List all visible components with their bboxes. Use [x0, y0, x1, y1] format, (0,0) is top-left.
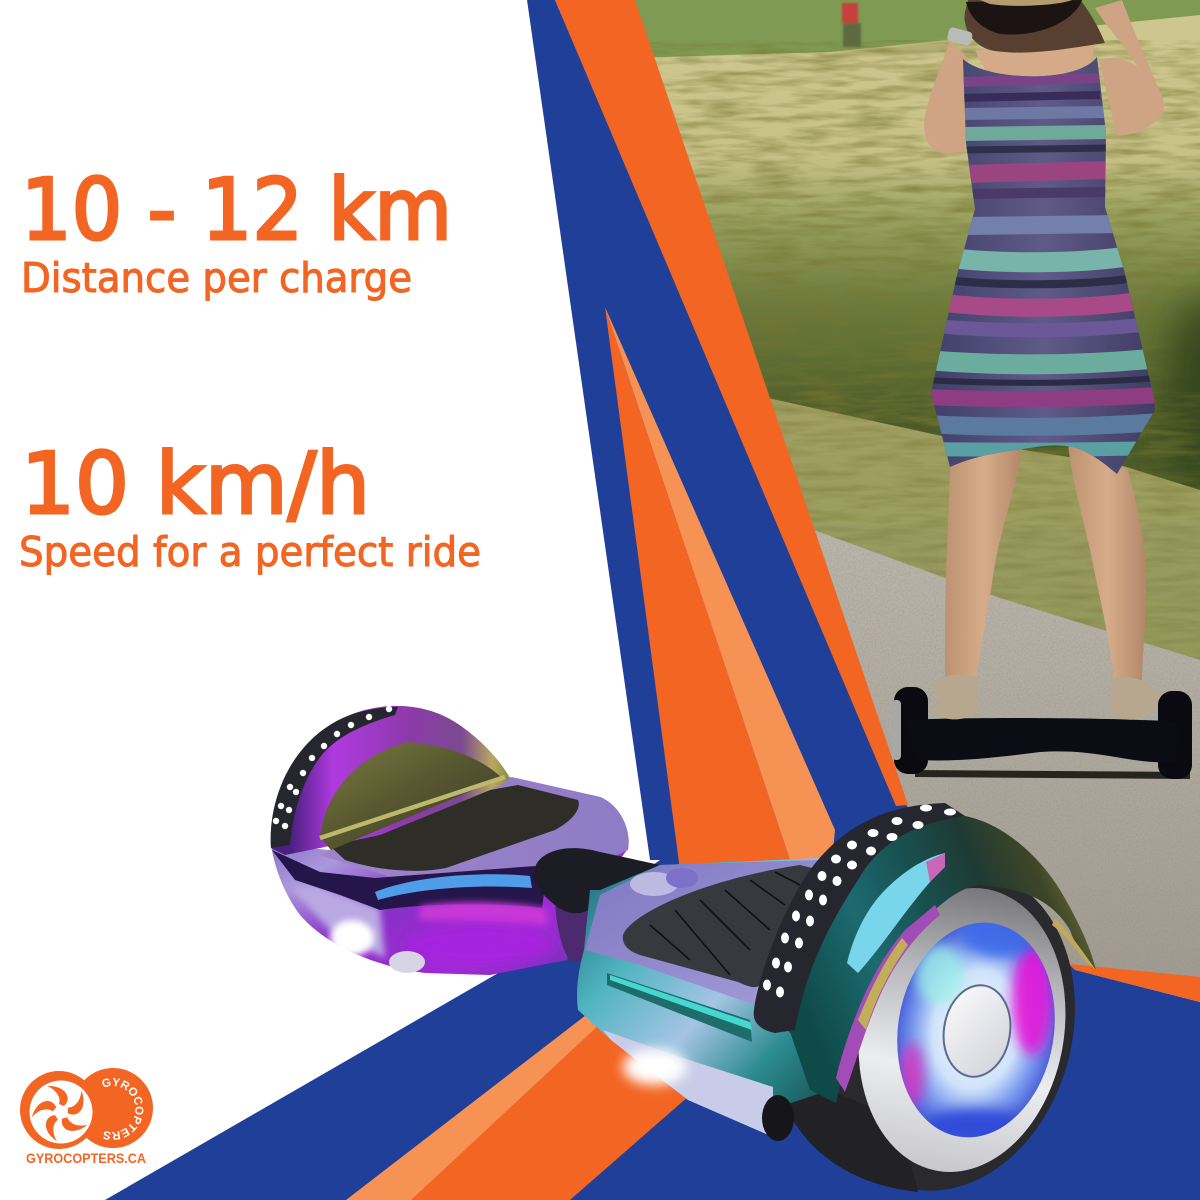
front mat grooves — [650, 872, 800, 975]
left wheel highlight — [892, 700, 901, 760]
lower stripe: light orange — [346, 1012, 602, 1200]
front LED strip — [754, 803, 965, 1033]
inner spike: orange — [605, 307, 790, 870]
gold fender tip edge — [1052, 918, 1096, 970]
rear magenta reflection — [420, 902, 548, 925]
distant figure in red — [842, 3, 861, 47]
hoverboard product — [271, 706, 1110, 1200]
distance value: 10 - 12 km — [21, 161, 452, 260]
hub — [937, 980, 1017, 1082]
rear LED dots — [273, 706, 392, 829]
speed value: 10 km/h — [21, 435, 370, 534]
dark crop on the right — [1165, 295, 1200, 505]
rear LED strip — [271, 707, 398, 848]
magenta glow — [1012, 945, 1052, 1055]
rear purple glow — [405, 925, 555, 965]
front LED dots — [763, 804, 956, 998]
left arm — [924, 40, 968, 153]
grass texture — [772, 394, 1200, 644]
deck logo — [630, 868, 698, 896]
upper back — [975, 45, 1095, 76]
stat: distance per charge — [21, 161, 452, 302]
front body — [577, 858, 840, 1137]
rear axle shadow — [762, 1095, 794, 1141]
front head lamp — [623, 1049, 687, 1085]
front lower pale body — [603, 1030, 773, 1137]
distant path — [815, 40, 950, 58]
right wheel — [1158, 691, 1192, 779]
tread — [785, 1090, 918, 1192]
small hoverboard — [892, 687, 1192, 779]
road texture — [800, 525, 1200, 1005]
hair — [965, 0, 1105, 53]
front fender — [787, 816, 1096, 1103]
twin ring — [73, 1068, 153, 1148]
tire — [786, 840, 1110, 1200]
right leg — [1068, 444, 1146, 685]
path verge grass — [770, 398, 1200, 660]
cyan reflection — [610, 975, 752, 1030]
pink edge of reflection — [926, 853, 945, 882]
front foot mat — [623, 865, 812, 987]
lower left magenta glow — [900, 1043, 924, 1107]
glowing wheel disc — [897, 922, 1055, 1138]
right sandal — [1110, 677, 1161, 720]
dress stripes — [925, 78, 1160, 450]
rear button — [389, 951, 425, 973]
cyan fender reflection — [847, 853, 945, 973]
rear pale lower flank — [290, 884, 385, 958]
left wheel — [894, 687, 928, 774]
right arm — [1095, 0, 1165, 135]
rear body — [271, 777, 628, 975]
neck joint — [534, 848, 660, 913]
dress — [925, 57, 1160, 474]
hat brim — [980, 0, 1072, 6]
rim — [837, 871, 1087, 1189]
field texture — [630, 40, 1200, 460]
purple inner reflection — [836, 905, 940, 1092]
lower stripe: orange — [411, 1012, 705, 1200]
rear yellow edge — [320, 777, 505, 838]
deck — [928, 718, 1158, 762]
diagonal stripes: outer orange band — [555, 0, 908, 806]
front deck — [585, 860, 819, 1010]
front chrome reflection — [607, 973, 752, 1042]
speed caption: Speed for a perfect ride — [19, 528, 481, 576]
fan disc — [30, 1080, 92, 1144]
rear chrome dark band — [272, 850, 545, 910]
ring lettering: GYROCOPTERS — [102, 1078, 144, 1140]
rear head lamp — [330, 920, 374, 956]
upper blue glow — [962, 913, 1038, 957]
gold inner reflection — [858, 938, 908, 1030]
rear fender inner window — [320, 742, 502, 850]
stat: speed — [19, 435, 481, 576]
far meadow — [635, 0, 1200, 58]
lower blue glow — [925, 1109, 1025, 1141]
left sandal — [932, 674, 978, 719]
inner spike: light orange — [605, 307, 835, 860]
rear foot mat — [331, 785, 579, 871]
rear fender — [271, 706, 510, 855]
rear body cyan reflection — [375, 874, 532, 900]
left leg — [945, 449, 1022, 680]
logo: gyrocopters.ca — [20, 1068, 153, 1166]
lower right orange wedge — [1070, 964, 1200, 1002]
paved road — [815, 530, 1200, 977]
teal glow — [916, 945, 964, 1005]
watch — [947, 28, 972, 46]
web address: GYROCOPTERS.CA — [26, 1151, 146, 1166]
distance caption: Distance per charge — [21, 254, 412, 302]
ground shadow — [915, 770, 1190, 779]
wheat field — [654, 15, 1200, 490]
rear top deck — [320, 775, 629, 880]
dark hat shadow — [966, 0, 1082, 35]
chrome connector — [555, 885, 598, 962]
fan blades — [32, 1086, 88, 1141]
photo: rider on a path beside a wheat field — [630, 0, 1200, 1010]
fan ring — [20, 1071, 98, 1149]
